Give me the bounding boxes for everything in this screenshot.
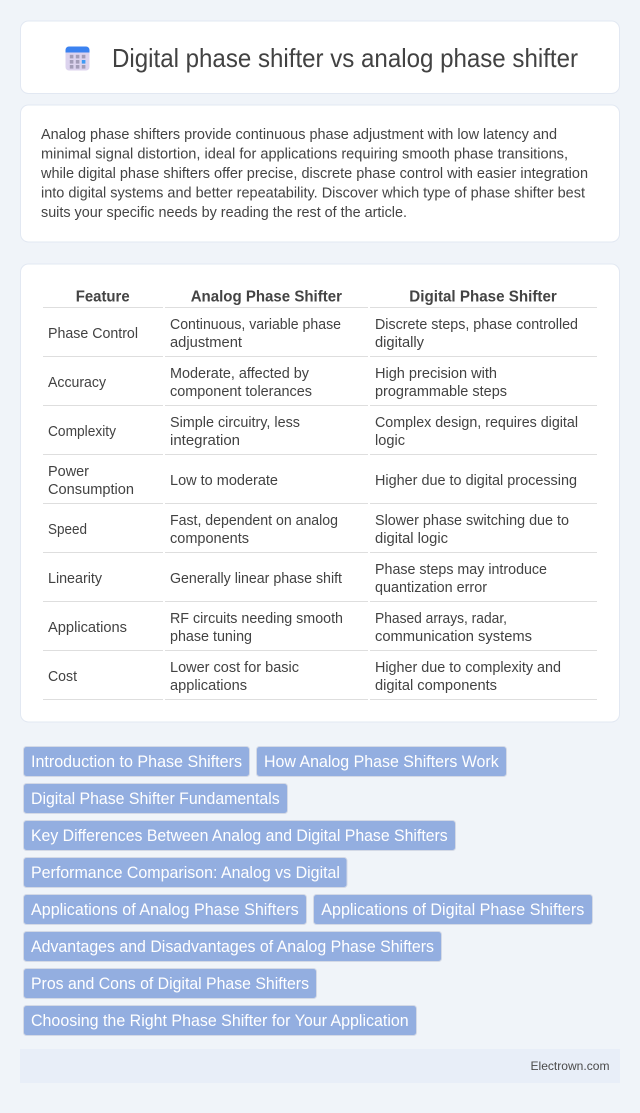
tag: Introduction to Phase Shifters [24,746,250,776]
table row: Applications: communication systems [375,629,532,645]
tag: Applications of Digital Phase Shifters [314,894,592,924]
table row: Accuracy: Moderate, affected by [170,366,310,382]
table row: Phase Control [43,317,597,357]
table row: Complexity: Complexity [48,424,117,440]
tag: How Analog Phase Shifters Work [256,746,506,776]
table row: Phase Control: digitally [375,335,425,351]
table row: Applications [43,611,597,651]
table row: Linearity: Generally linear phase shift [170,571,342,587]
table row: Speed [43,513,597,553]
footer [20,1049,620,1083]
table row: Speed: components [170,531,249,547]
table row: Speed: digital logic [375,531,448,547]
text block: introduction paragraph: into digital systems and better repeatability. Discover which type of phase shifter best [41,186,585,202]
table header [43,288,597,308]
panel: title card [20,21,620,94]
table row: Complexity: Simple circuitry, less [170,415,300,431]
table row: Cost: applications [170,678,247,694]
tag: Digital Phase Shifter Fundamentals [24,784,288,814]
footer: Electrown.com [530,1059,610,1073]
table row: Complexity: Complex design, requires digital [375,415,578,431]
tag: Performance Comparison: Analog vs Digital: Performance Comparison: Analog vs Digital [31,864,340,882]
tag: How Analog Phase Shifters Work: How Analog Phase Shifters Work [264,753,499,771]
tag: Pros and Cons of Digital Phase Shifters: Pros and Cons of Digital Phase Shifters [31,975,309,993]
table row: Power Consumption: Low to moderate [170,473,278,489]
table row: Cost: Higher due to complexity and [375,660,561,676]
table row: Complexity: logic [375,433,405,449]
tag: Applications of Digital Phase Shifters: Applications of Digital Phase Shifters [321,901,584,919]
table row: Complexity: integration [170,433,240,449]
table row: Accuracy: programmable steps [375,384,507,400]
table row: Phase Control: Phase Control [48,326,138,342]
panel: comparison table [20,264,620,722]
tag: Introduction to Phase Shifters: Introduction to Phase Shifters [31,753,242,771]
table row: Applications: Applications [48,620,127,636]
text block: introduction paragraph [40,127,588,221]
title: Digital phase shifter vs analog phase shifter [112,43,578,73]
table row: Linearity [43,562,597,602]
tag: Advantages and Disadvantages of Analog Phase Shifters [24,932,442,962]
table row: Applications: RF circuits needing smooth [170,611,343,627]
text block: introduction paragraph: minimal signal distortion, ideal for applications requiring smooth phase transitions, [41,146,568,162]
table row: Applications: Phased arrays, radar, [375,611,507,627]
table row: Accuracy: High precision with [375,366,497,382]
table row: Complexity [43,415,597,455]
table row: Cost: Lower cost for basic [170,660,299,676]
table row: Accuracy: component tolerances [170,384,312,400]
table header: Digital Phase Shifter [409,288,557,306]
table row: Phase Control: adjustment [170,335,242,351]
table row: Phase Control: Discrete steps, phase controlled [375,317,578,333]
icon: calendar grid [66,46,90,70]
table row: Power Consumption: Consumption [48,482,134,498]
tag: Choosing the Right Phase Shifter for Your Application: Choosing the Right Phase Shifter for Your Application [31,1012,409,1030]
table row: Cost [43,660,597,700]
table row: Phase Control: Continuous, variable phase [170,317,341,333]
table row: Speed: Slower phase switching due to [375,513,569,529]
table row: Speed: Fast, dependent on analog [170,513,338,529]
table header: Analog Phase Shifter [191,288,342,306]
table row: Power Consumption: Higher due to digital processing [375,473,577,489]
table row: Cost: digital components [375,678,497,694]
tag: Key Differences Between Analog and Digital Phase Shifters [24,820,456,850]
tag: Applications of Analog Phase Shifters: Applications of Analog Phase Shifters [31,901,299,919]
table row: Applications: phase tuning [170,629,252,645]
tag: Key Differences Between Analog and Digital Phase Shifters: Key Differences Between Analog and Digital Phase Shifters [31,827,448,845]
table row: Linearity: quantization error [375,580,487,596]
table row: Accuracy [43,366,597,406]
table row: Accuracy: Accuracy [48,375,107,391]
table row: Power Consumption: Power [48,464,89,480]
tag: Applications of Analog Phase Shifters [24,894,306,924]
panel: topic tags [24,746,592,1036]
table row: Speed: Speed [48,522,87,538]
panel: introduction [20,105,620,242]
tag: Digital Phase Shifter Fundamentals: Digital Phase Shifter Fundamentals [31,790,280,808]
table row: Cost: Cost [48,669,77,685]
tag: Choosing the Right Phase Shifter for Your Application [24,1006,416,1036]
table row: Power Consumption [43,464,597,504]
text block: introduction paragraph: suits your specific needs by reading the rest of the article. [41,205,407,221]
tag: Performance Comparison: Analog vs Digital [24,858,347,888]
text block: introduction paragraph: while digital phase shifters offer precise, discrete phase control with easier integration [40,166,588,182]
table row: Linearity: Phase steps may introduce [375,562,547,578]
table row: Linearity: Linearity [48,571,103,587]
tag: Pros and Cons of Digital Phase Shifters [24,968,316,998]
table header: Feature [76,288,130,306]
tag: Advantages and Disadvantages of Analog Phase Shifters: Advantages and Disadvantages of Analog Phase Shifters [31,938,434,956]
text block: introduction paragraph: Analog phase shifters provide continuous phase adjustment with low latency and [41,127,557,143]
